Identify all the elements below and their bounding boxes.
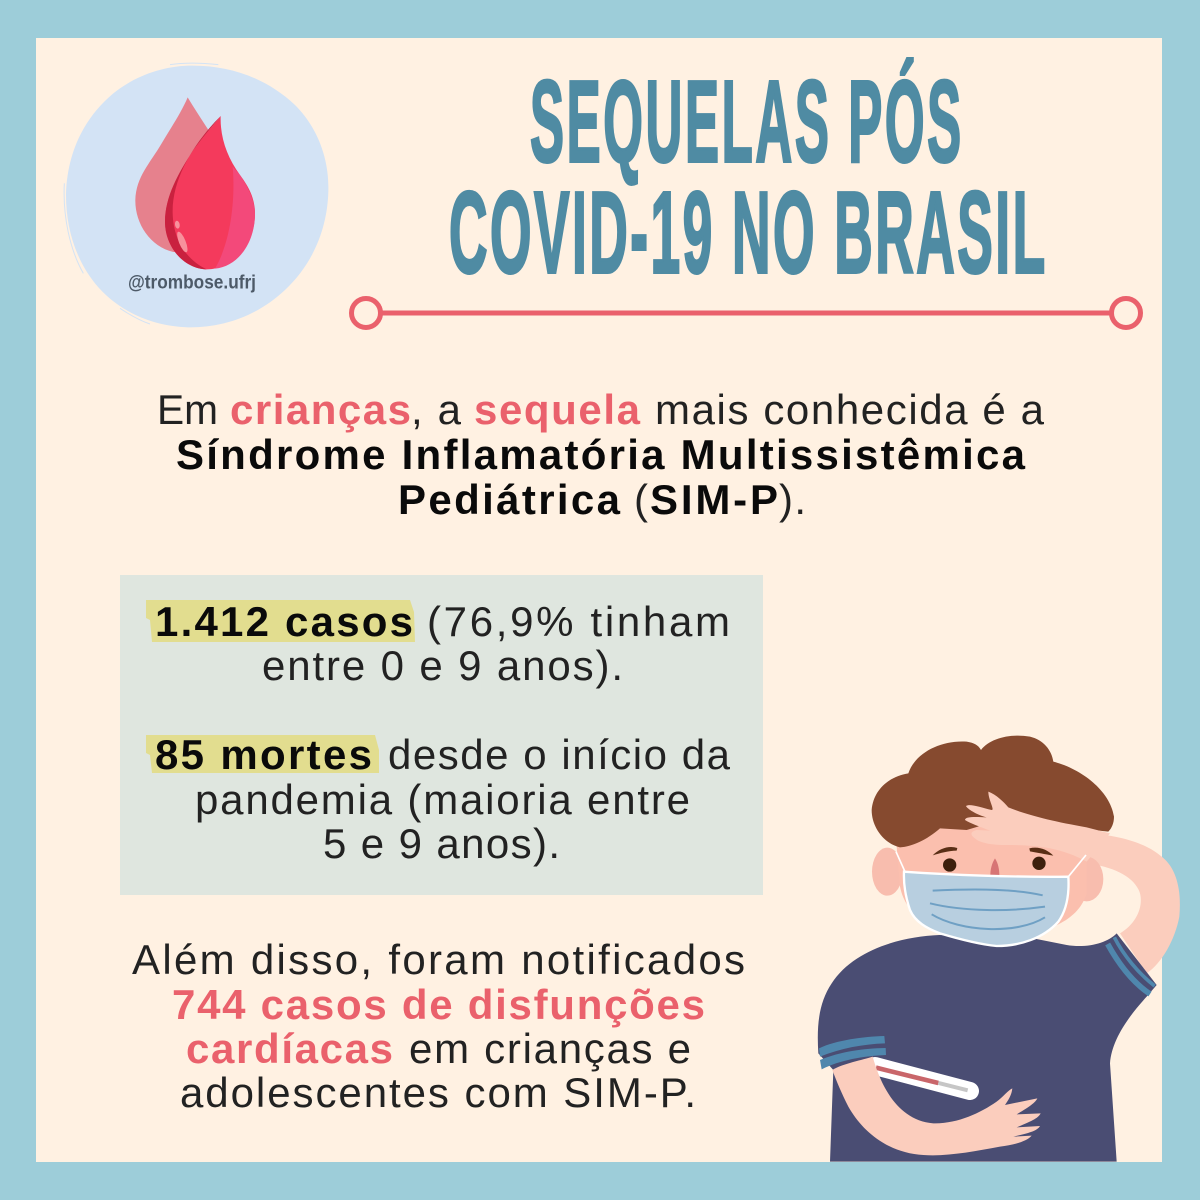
face	[895, 827, 1087, 937]
intro text: mais conhecida é a	[655, 386, 1045, 433]
intro text: SIM-P	[650, 476, 778, 523]
mask ear loops	[896, 852, 1086, 877]
closing text: Além disso, foram notificados	[132, 936, 745, 983]
title line 1: SEQUELAS PÓS	[530, 57, 961, 186]
highlight: 85 mortes	[146, 735, 379, 773]
intro text: sequela	[474, 386, 641, 433]
sleeve stripes right	[1108, 937, 1155, 994]
nose	[990, 858, 999, 875]
logo handle: @trombose.ufrj	[128, 273, 256, 294]
logo circle	[66, 66, 328, 327]
deaths stat: desde o início da	[388, 731, 731, 778]
ears	[872, 848, 1103, 901]
title divider	[352, 298, 1140, 328]
eyes	[943, 857, 1046, 872]
closing text	[132, 936, 745, 1116]
mask	[904, 872, 1069, 946]
intro text	[157, 386, 1045, 523]
intro text: (	[634, 476, 648, 523]
logo highlights	[174, 220, 190, 253]
deaths stat	[155, 731, 731, 867]
intro text: ).	[779, 476, 806, 523]
intro text: Síndrome Inflamatória Multissistêmica	[176, 431, 1026, 478]
title	[449, 57, 1045, 298]
highlight: 1.412 casos	[146, 600, 415, 642]
closing text: adolescentes com SIM-P.	[180, 1069, 696, 1116]
cases stat: entre 0 e 9 anos).	[262, 642, 623, 689]
closing text: cardíacas	[186, 1025, 393, 1072]
thermometer	[875, 1066, 970, 1091]
logo back drop	[135, 97, 231, 252]
cases stat: 1.412 casos	[155, 598, 413, 645]
sleeve stripes left	[819, 1036, 886, 1069]
intro text: , a	[411, 386, 462, 433]
deaths stat: 5 e 9 anos).	[323, 820, 560, 867]
cases stat: (76,9% tinham	[427, 598, 730, 645]
mask folds	[930, 890, 1045, 929]
deaths stat: pandemia (maioria entre	[195, 776, 690, 823]
logo brush marks	[64, 63, 218, 324]
logo front drop	[165, 116, 255, 269]
raised arm	[1087, 833, 1180, 973]
lower arm and hand	[832, 1057, 1041, 1155]
hair	[872, 736, 1114, 847]
closing text: 744 casos de disfunções	[172, 981, 705, 1028]
eyebrows	[933, 847, 1053, 856]
logo drop shade left	[165, 116, 221, 269]
cases stat	[155, 598, 730, 689]
shirt	[818, 933, 1157, 1162]
logo badge	[64, 63, 328, 327]
intro text: Em	[157, 386, 218, 433]
intro text: crianças	[230, 386, 411, 433]
hand on forehead	[965, 792, 1110, 862]
intro text: Pediátrica	[398, 476, 621, 523]
closing text: em crianças e	[409, 1025, 691, 1072]
stats panel	[120, 575, 763, 895]
logo drop shade right	[215, 167, 255, 269]
illustration: sick child with mask and thermometer	[818, 736, 1180, 1162]
title line 2: COVID-19 NO BRASIL	[449, 168, 1045, 298]
deaths stat: 85 mortes	[155, 731, 372, 778]
